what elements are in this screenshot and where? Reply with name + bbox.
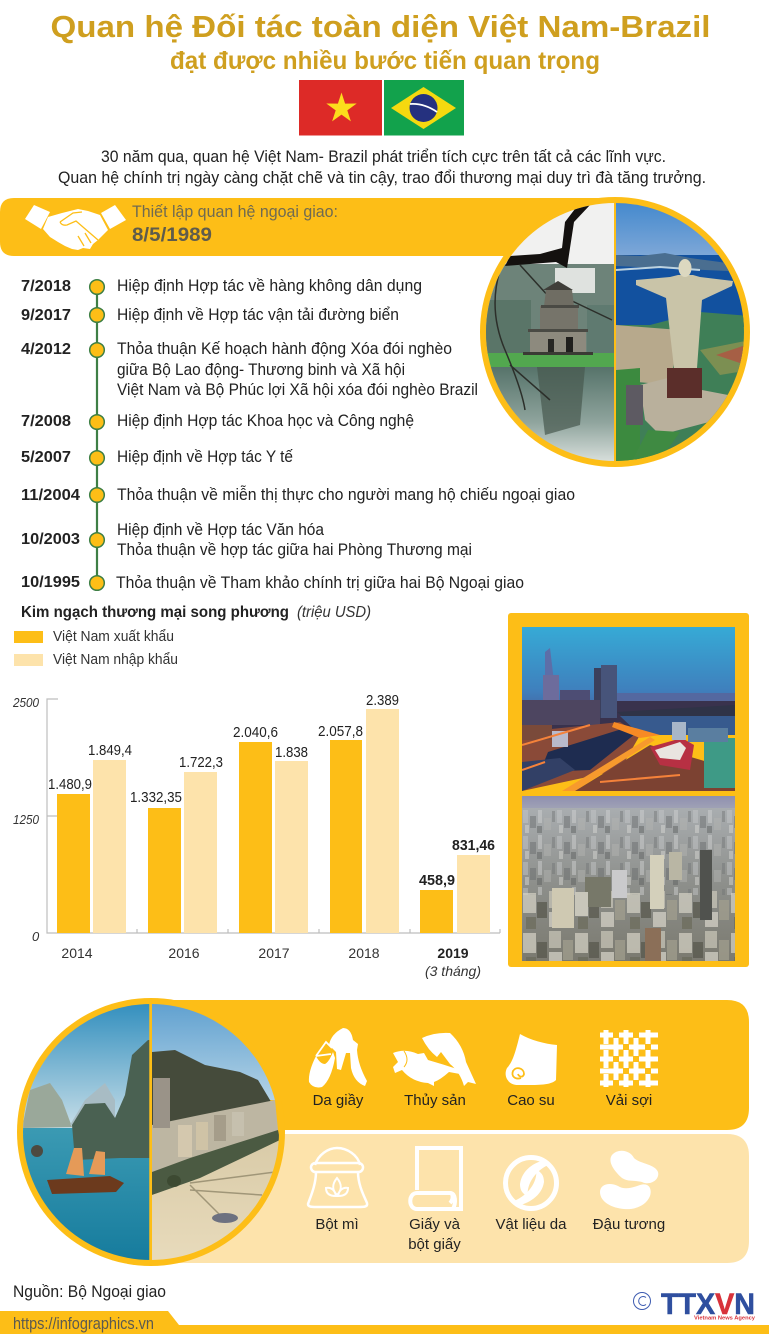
icon: handshake — [25, 205, 126, 250]
timeline dots — [90, 280, 104, 590]
export labels — [313, 1092, 652, 1109]
flag: Brazil — [384, 80, 464, 136]
icon: shoes — [309, 1028, 367, 1087]
bar values: 1.722,3 — [179, 755, 223, 771]
photo: Ho Chi Minh City — [522, 627, 735, 791]
intro text: Quan hệ chính trị ngày càng chặt chẽ và tin cậy, trao đổi thương mại duy trì đà tăng trưởng. — [58, 168, 706, 187]
bar values: 831,46 — [452, 838, 495, 854]
icon: leather material — [506, 1158, 556, 1208]
export labels: Cao su — [507, 1092, 555, 1109]
import labels: Đậu tương — [593, 1216, 665, 1233]
timeline dates: 11/2004 — [21, 487, 80, 504]
footer strip — [0, 1311, 769, 1334]
x axis labels: (3 tháng) — [425, 963, 481, 979]
bar values: 1.849,4 — [88, 743, 132, 759]
timeline events: Việt Nam và Bộ Phúc lợi Xã hội xóa đói nghèo Brazil — [117, 380, 478, 399]
Rio half — [616, 197, 750, 470]
icon: woven fabric — [600, 1030, 658, 1087]
intro text — [58, 147, 706, 187]
icon: fish — [393, 1033, 476, 1086]
timeline events: Hiệp định Hợp tác về hàng không dân dụng — [117, 276, 422, 295]
subtitle: đạt được nhiều bước tiến quan trọng — [170, 47, 600, 75]
import labels: Giấy và — [409, 1216, 461, 1233]
export labels: Vải sợi — [606, 1092, 652, 1109]
timeline dates: 9/2017 — [21, 307, 71, 324]
timeline — [21, 276, 575, 592]
timeline dates: 4/2012 — [21, 341, 71, 358]
banner label: Thiết lập quan hệ ngoại giao: — [132, 202, 338, 221]
logo wordmark: TTXVN — [661, 1288, 755, 1321]
Ha Long half — [20, 1000, 150, 1268]
y axis labels: 1250 — [13, 812, 40, 827]
timeline events: Hiệp định về Hợp tác Y tế — [117, 447, 293, 466]
bar values: 2.040,6 — [233, 725, 278, 741]
bar values — [48, 693, 495, 889]
timeline events — [116, 276, 575, 592]
website: https://infographics.vn — [13, 1315, 154, 1333]
bar values: 2.057,8 — [318, 724, 363, 740]
y axis labels — [12, 695, 40, 944]
x axis labels — [61, 945, 481, 979]
x axis labels: 2018 — [348, 945, 380, 961]
y axis labels: 2500 — [12, 695, 40, 710]
import labels: Bột mì — [315, 1216, 359, 1233]
photo circle: Ha Long and Rio beach — [17, 998, 285, 1270]
panel: exports — [140, 1000, 749, 1130]
logo: TTXVN — [634, 1288, 756, 1322]
icon: flour sack — [308, 1148, 367, 1207]
y axis labels: 0 — [32, 929, 40, 944]
timeline events: giữa Bộ Lao động- Thương binh và Xã hội — [117, 360, 405, 379]
timeline events: Hiệp định Hợp tác Khoa học và Công nghệ — [117, 411, 414, 430]
photo: Sao Paulo — [522, 796, 735, 961]
export labels: Thủy sản — [404, 1092, 466, 1109]
timeline dates — [21, 278, 80, 591]
x axis labels: 2019 — [437, 945, 469, 961]
photo panel: cities — [508, 613, 749, 967]
photo circle: Hanoi and Rio — [480, 197, 750, 470]
flag: Vietnam — [299, 80, 382, 136]
timeline events: Thỏa thuận Kế hoạch hành động Xóa đói nghèo — [117, 339, 452, 358]
import labels — [315, 1216, 665, 1253]
timeline events: Thỏa thuận về Tham khảo chính trị giữa hai Bộ Ngoại giao — [116, 573, 524, 592]
x axis labels: 2016 — [168, 945, 200, 961]
export bars — [57, 740, 453, 933]
bar values: 1.332,35 — [130, 790, 182, 806]
timeline events: Thỏa thuận về miễn thị thực cho người mang hộ chiếu ngoại giao — [117, 485, 575, 504]
copyright mark — [634, 1292, 650, 1310]
x axis labels: 2017 — [258, 945, 290, 961]
banner: diplomatic relations — [0, 198, 615, 256]
Hanoi half — [480, 197, 614, 467]
imports row — [308, 1148, 665, 1253]
timeline dates: 10/1995 — [21, 574, 80, 591]
chart axes — [47, 699, 500, 933]
bar chart — [12, 693, 500, 979]
timeline axis — [96, 287, 98, 583]
legend: Việt Nam xuất khẩu — [53, 629, 174, 645]
logo tagline: Vietnam News Agency — [694, 1316, 756, 1322]
exports row — [309, 1028, 658, 1109]
legend: Việt Nam nhập khẩu — [53, 652, 178, 668]
timeline dates: 10/2003 — [21, 531, 80, 548]
timeline events: Hiệp định về Hợp tác Văn hóa — [117, 520, 324, 539]
legend — [14, 629, 178, 668]
import bars — [93, 709, 490, 933]
flags — [299, 80, 464, 136]
x axis labels: 2014 — [61, 945, 93, 961]
bar values: 458,9 — [419, 873, 455, 889]
timeline events: Hiệp định về Hợp tác vận tải đường biển — [117, 305, 399, 324]
timeline dates: 7/2018 — [21, 278, 71, 295]
bar values: 1.480,9 — [48, 777, 92, 793]
source: Nguồn: Bộ Ngoại giao — [13, 1283, 166, 1301]
timeline dates: 5/2007 — [21, 449, 71, 466]
bar values: 1.838 — [275, 745, 308, 761]
title: Quan hệ Đối tác toàn diện Việt Nam-Brazil — [50, 9, 710, 44]
bar values: 2.389 — [366, 693, 399, 709]
import labels: bột giấy — [408, 1236, 461, 1253]
icon: paper roll — [410, 1148, 461, 1209]
Rio beach half — [152, 1000, 285, 1270]
timeline dates: 7/2008 — [21, 413, 71, 430]
chart heading: Kim ngạch thương mại song phương — [21, 604, 289, 621]
intro text: 30 năm qua, quan hệ Việt Nam- Brazil phát triển tích cực trên tất cả các lĩnh vực. — [101, 147, 666, 166]
banner date: 8/5/1989 — [132, 225, 212, 246]
icon: soybeans — [600, 1151, 658, 1209]
import labels: Vật liệu da — [496, 1216, 567, 1233]
panel: imports — [140, 1134, 749, 1263]
chart heading: (triệu USD) — [297, 604, 371, 621]
icon: rubber roll — [506, 1034, 557, 1085]
export labels: Da giầy — [313, 1092, 364, 1109]
timeline events: Thỏa thuận về hợp tác giữa hai Phòng Thương mại — [117, 540, 472, 559]
